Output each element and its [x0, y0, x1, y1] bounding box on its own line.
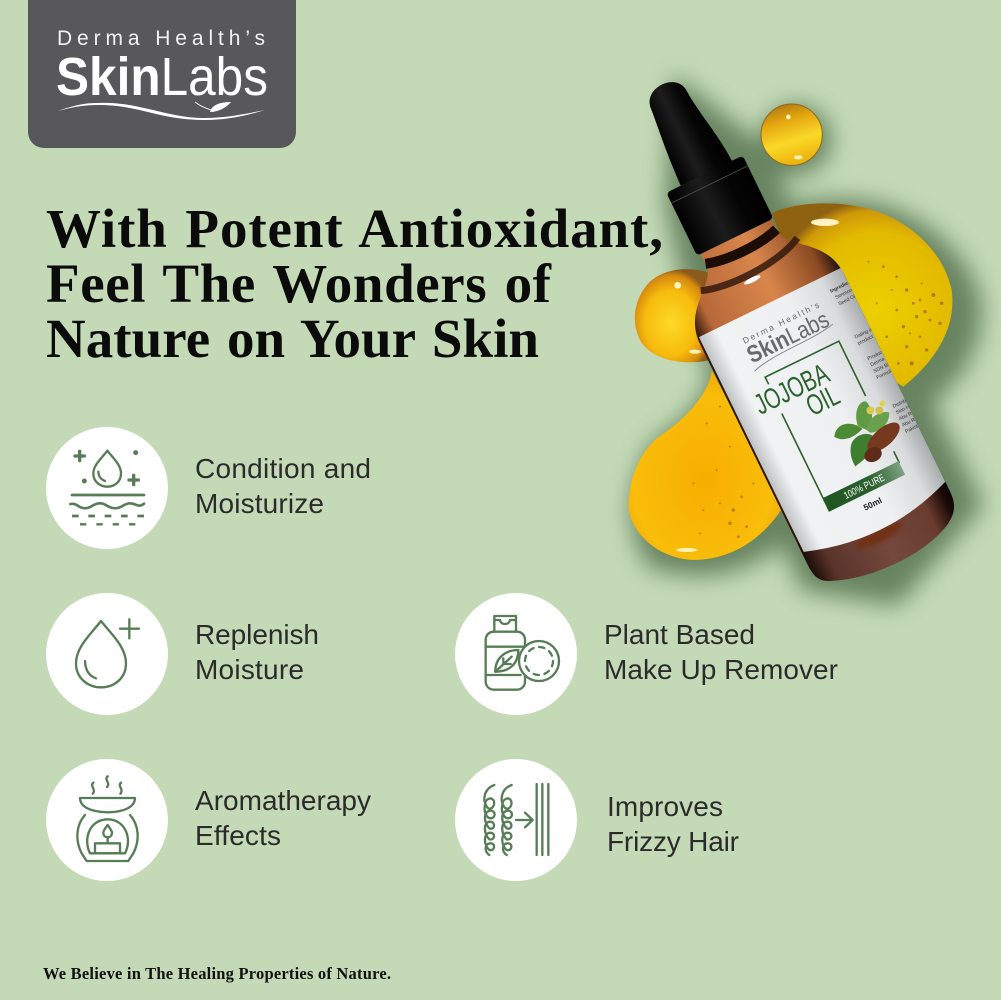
- oil pool right: [772, 203, 952, 387]
- benefit: replenish moisture: [46, 593, 319, 715]
- purity band: 100% PURE: [842, 473, 887, 502]
- product name: OIL: [801, 380, 845, 423]
- label: Moisturize: [195, 488, 324, 519]
- label: Make Up Remover: [604, 654, 838, 685]
- dropper cap: [666, 156, 773, 256]
- benefit: plant based make up remover: [455, 593, 838, 715]
- side text: Derma: [870, 356, 886, 368]
- headline: Nature on Your Skin: [46, 308, 539, 369]
- brand logo: [28, 0, 296, 148]
- bottle glass: [665, 201, 950, 562]
- drop shadows: [643, 97, 970, 593]
- icon: frizzy to straight hair: [484, 784, 548, 855]
- label: Frizzy Hair: [607, 826, 739, 857]
- side text: Ingredients:: [829, 277, 858, 295]
- label: [604, 619, 838, 685]
- oil pool lower left: [628, 370, 783, 560]
- headline: With Potent Antioxidant,: [46, 198, 663, 259]
- dropper bottle: [650, 82, 954, 581]
- volume: 50ml: [862, 495, 884, 513]
- label logo: SkinLabs: [743, 306, 834, 369]
- icon: oil burner: [77, 776, 138, 861]
- purity band: [823, 461, 905, 511]
- headline: Feel The Wonders of: [46, 253, 552, 314]
- label: [195, 453, 371, 519]
- label: Replenish: [195, 619, 319, 650]
- oil drop left: [635, 269, 710, 362]
- oil drop top: [761, 104, 822, 165]
- label: Aromatherapy: [195, 785, 371, 816]
- label: Moisture: [195, 654, 304, 685]
- icon: remover bottle and cotton pad: [486, 616, 559, 690]
- side text: [830, 282, 918, 433]
- benefit: improves frizzy hair: [455, 759, 739, 881]
- side text: Simmondsia: [834, 283, 862, 301]
- product name: [749, 358, 845, 443]
- brand logo: SkinLabs: [56, 47, 268, 107]
- side text: product: [857, 334, 875, 347]
- label: [195, 619, 319, 685]
- side text: Abu Road: [898, 407, 921, 422]
- icon: skin layers with drop: [70, 451, 144, 524]
- icon: drop with plus: [76, 619, 139, 687]
- plant illustration: [826, 391, 911, 473]
- side text: Skin Health: [895, 399, 921, 416]
- label: Plant Based: [604, 619, 755, 650]
- label: Improves: [607, 791, 723, 822]
- bottle base: [798, 474, 968, 598]
- bottle label: [699, 268, 946, 552]
- label: [195, 785, 371, 851]
- side text: Pakistan: [904, 421, 924, 435]
- footer tagline: We Believe in The Healing Properties of Nature.: [43, 964, 391, 983]
- side text: Abu Road: [901, 413, 924, 429]
- benefit: condition and moisturize: [46, 427, 371, 549]
- side text: Distributed: [892, 394, 916, 410]
- brand logo: Derma Health’s: [57, 27, 265, 50]
- label frame: [764, 341, 905, 511]
- headline: [46, 198, 663, 369]
- dropper bulb: [637, 72, 734, 190]
- label: Condition and: [195, 453, 371, 484]
- benefit: aromatherapy effects: [46, 759, 371, 881]
- product illustration: oil and dropper bottle: [590, 44, 979, 598]
- side text: Formula: [876, 367, 895, 381]
- label: [607, 791, 739, 857]
- side text: Dating and: [854, 324, 878, 340]
- side text: Seed Oil: [837, 293, 857, 307]
- label logo: Derma Health's: [741, 300, 821, 346]
- side text: Produced: [866, 347, 889, 362]
- product name: JOJOBA: [749, 358, 835, 421]
- side text: SDN BHD: [873, 359, 896, 375]
- label: Effects: [195, 820, 281, 851]
